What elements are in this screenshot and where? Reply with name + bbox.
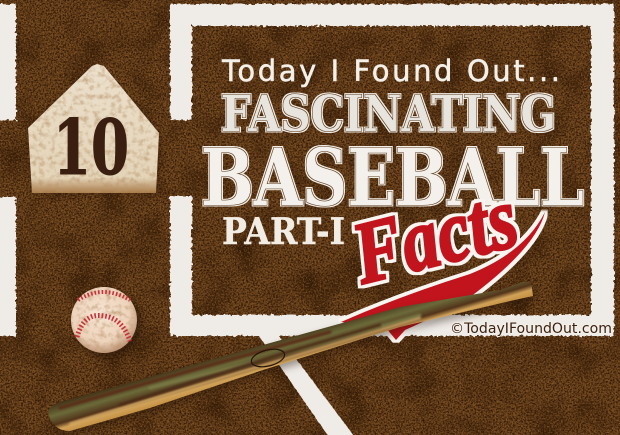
baseball (71, 287, 141, 358)
copyright credit: ©TodayIFoundOut.com (450, 321, 612, 337)
Facts script logo (341, 169, 545, 340)
bat wood streaks (60, 315, 420, 424)
heading: Fascinating: FASCINATING (221, 84, 556, 143)
Facts word: Facts (343, 169, 527, 304)
bat logo (250, 346, 286, 370)
heading: Part-I: PART-I (222, 211, 345, 253)
home plate with number 10 (28, 64, 159, 193)
heading: Today I Found Out: Today I Found Out... (221, 54, 560, 88)
baseball bat (48, 282, 536, 435)
number 10: 10 (53, 103, 129, 192)
swoosh tail (341, 212, 545, 340)
